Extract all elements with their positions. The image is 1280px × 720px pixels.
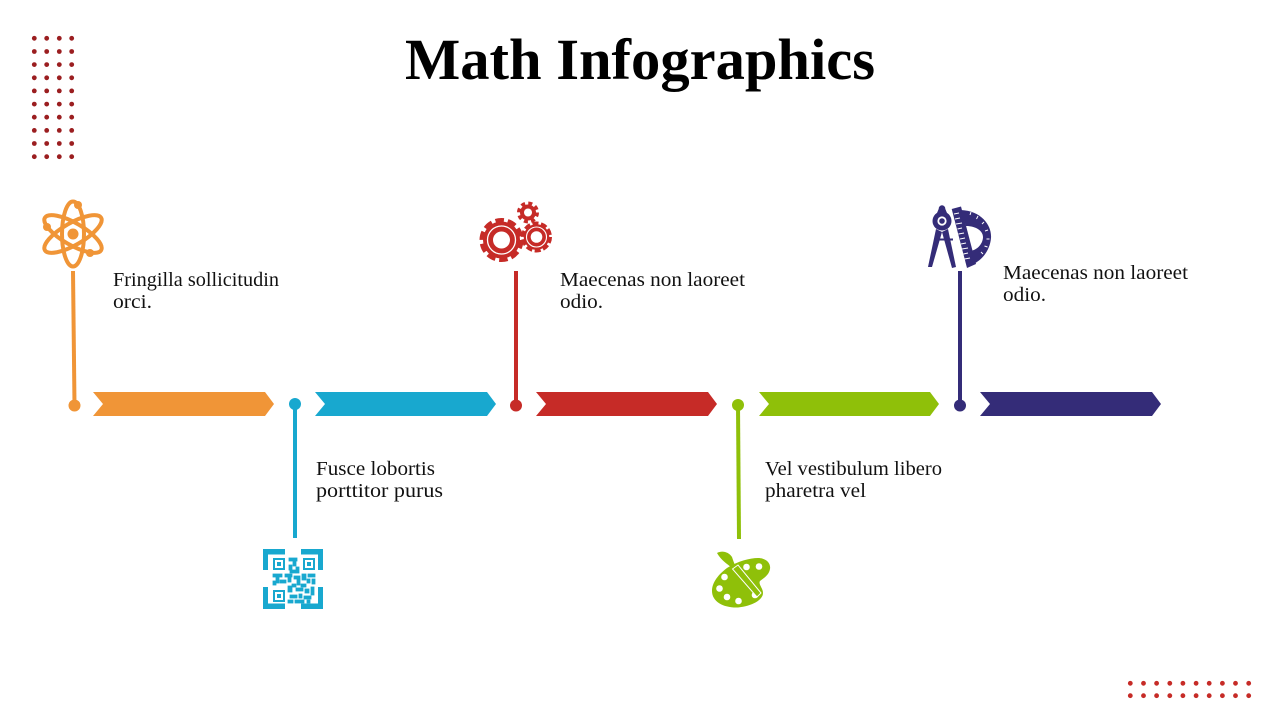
text: maecenas one (560, 270, 746, 313)
decorative dot grid: bottom right (1128, 681, 1251, 698)
text: maecenas one: odio. (560, 292, 603, 313)
timeline arrow: red (536, 392, 717, 416)
text: maecenas two: odio. (1003, 285, 1046, 306)
icon: compass and protractor (928, 205, 991, 268)
text: vel vestibulum: pharetra vel (765, 481, 867, 502)
timeline arrow: orange (93, 392, 274, 416)
connector pin: blue (289, 398, 301, 538)
text: fusce: porttitor purus (316, 481, 443, 502)
connector pin: orange (68, 271, 80, 412)
decorative dot grid: top left (32, 36, 74, 159)
icon: atom (39, 201, 107, 266)
text: fringilla: Fringilla sollicitudin (113, 270, 279, 291)
connector pin: green (732, 399, 744, 539)
timeline arrow: green (759, 392, 939, 416)
icon: gears (482, 204, 550, 260)
title: Math Infographics (405, 27, 875, 92)
text: fringilla: orci. (113, 292, 152, 313)
icon: paint palette and brush (712, 552, 770, 608)
text: fusce: Fusce lobortis (316, 459, 435, 480)
text: maecenas two (1003, 263, 1189, 306)
connector pin: navy (954, 271, 966, 412)
text: fusce (316, 459, 443, 502)
text: vel vestibulum: Vel vestibulum libero (765, 459, 942, 480)
icon: QR code (263, 549, 323, 609)
text: fringilla (113, 270, 279, 313)
text: maecenas two: Maecenas non laoreet (1003, 263, 1189, 284)
connector pin: red (510, 271, 522, 412)
text: vel vestibulum (765, 459, 942, 502)
timeline arrow: blue (315, 392, 496, 416)
text: maecenas one: Maecenas non laoreet (560, 270, 746, 291)
timeline arrow: navy (980, 392, 1161, 416)
